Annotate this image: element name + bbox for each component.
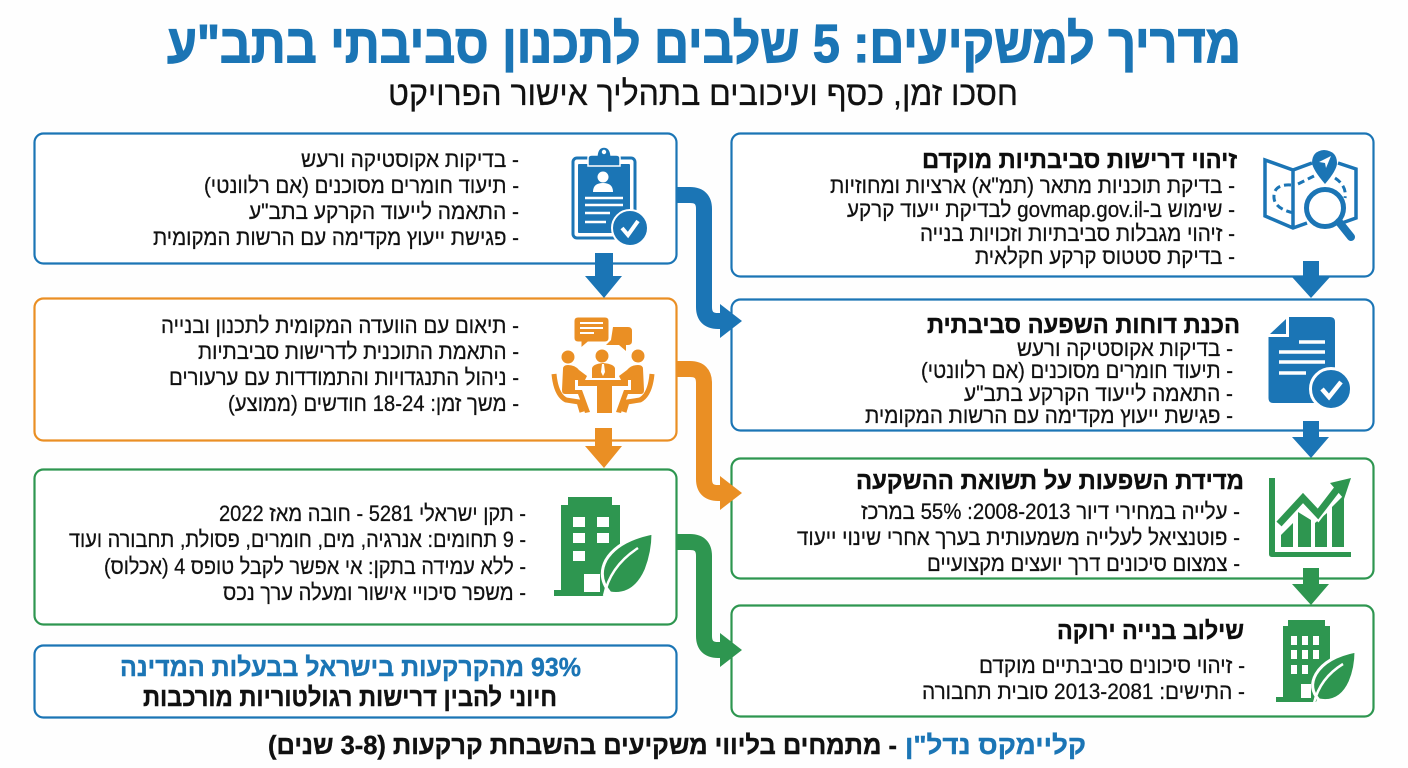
text block: left 2: - התאמת התוכנית לדרישות סביבתיות [198, 339, 519, 364]
text block: left 1: - פגישת ייעוץ מקדימה עם הרשות המקומית [153, 225, 519, 250]
icon: document with check [1268, 317, 1352, 410]
panel: environmental impact reports (right 2) [732, 300, 1374, 430]
footer [268, 730, 1086, 760]
text block: right 2: - תיעוד חומרים מסוכנים (אם רלוונטי) [921, 358, 1233, 383]
arrow: left 1 down [585, 253, 622, 298]
icon: green building with leaf [554, 497, 653, 596]
heading: right 3: מדידת השפעות על תשואת ההשקעה [856, 468, 1244, 495]
arrow: right 2 down [1292, 421, 1329, 458]
text block: left 2: - תיאום עם הוועדה המקומית לתכנון ובנייה [161, 313, 519, 338]
text block: right 4: - זיהוי סיכונים סביבתיים מוקדם [979, 653, 1245, 678]
arrow: right 3 down [1292, 568, 1329, 605]
text block: right 4 [922, 653, 1245, 704]
text block: left 2 [161, 313, 519, 416]
panel: early identification (right 1) [732, 134, 1374, 276]
text block: right 2: - פגישת ייעוץ מקדימה עם הרשות המקומית [865, 403, 1233, 428]
text block: right 3 [797, 499, 1240, 576]
panel: local committee coordination (left 2) [34, 298, 676, 440]
callout stat: 93% מהקרקעות בישראל בבעלות המדינה [120, 652, 581, 682]
text block: right 1: - בדיקת סטטוס קרקע חקלאית [975, 244, 1235, 269]
icon: clipboard with check [573, 147, 648, 246]
text block: right 2 [865, 336, 1233, 428]
heading: right 1: זיהוי דרישות סביבתיות מוקדם [922, 147, 1237, 174]
text block: right 1 [830, 173, 1235, 269]
text block: right 1: - בדיקת תוכניות מתאר (תמ"א) ארציות ומחוזיות [830, 173, 1235, 198]
text block: right 3: - צמצום סיכונים דרך יועצים מקצועיים [927, 551, 1240, 576]
text block: left 1: - תיעוד חומרים מסוכנים (אם רלוונטי) [204, 173, 519, 198]
connector arrow: blue [676, 195, 742, 338]
text block: left 3: - תקן ישראלי 5281 - חובה מאז 2022 [219, 501, 526, 526]
text block: left 1: - בדיקות אקוסטיקה ורעש [301, 147, 519, 172]
text block: left 3 [69, 501, 526, 605]
panel: israeli standard 5281 (left 3) [34, 470, 676, 624]
panel: green building integration (right 4) [732, 606, 1374, 716]
panel: measuring ROI (right 3) [732, 458, 1374, 578]
subtitle: חסכו זמן, כסף ועיכובים בתהליך אישור הפרויקט [388, 75, 1018, 113]
text block: right 1: - זיהוי מגבלות סביבתיות וזכויות בנייה [920, 221, 1235, 246]
arrow: right 1 down [1292, 261, 1330, 298]
callout text: חיוני להבין דרישות רגולטוריות מורכבות [143, 682, 557, 712]
icon: map with pin and magnifier [1265, 150, 1356, 237]
footer brand: קליימקס נדל"ן [905, 730, 1086, 760]
icon: rising bar chart [1269, 478, 1351, 557]
heading: right 4: שילוב בנייה ירוקה [1057, 618, 1244, 645]
icon: small green building with leaf [1276, 620, 1356, 703]
text block: right 2: - התאמה לייעוד הקרקע בתב"ע [964, 381, 1233, 406]
text block: left 3: - משפר סיכויי אישור ומעלה ערך נכס [223, 580, 526, 605]
text block: right 3: - עלייה במחירי דיור 2008-2013: 55% במרכז [861, 499, 1240, 524]
panel: acoustic checks (left 1) [34, 134, 676, 264]
footer tagline: - מתמחים בליווי משקיעים בהשבחת קרקעות (3-8 שנים) [268, 730, 897, 760]
text block: left 2: - משך זמן: 18-24 חודשים (ממוצע) [228, 391, 519, 416]
arrow: left 2 down [585, 428, 622, 468]
text block: left 3: - ללא עמידה בתקן: אי אפשר לקבל טופס 4 (אכלוס) [104, 554, 526, 579]
text block: right 2: - בדיקות אקוסטיקה ורעש [1017, 336, 1233, 361]
panel: 93% state land callout [34, 646, 676, 718]
connector arrow: orange [676, 369, 742, 510]
text block: right 3: - פוטנציאל לעלייה משמעותית בערך אחרי שינוי ייעוד [797, 525, 1240, 550]
title: מדריך למשקיעים: 5 שלבים לתכנון סביבתי בתב"ע [167, 14, 1241, 74]
connector arrow: green [676, 542, 742, 667]
text block: left 3: - 9 תחומים: אנרגיה, מים, חומרים, פסולת, תחבורה ועוד [69, 527, 526, 552]
heading: right 2: הכנת דוחות השפעה סביבתית [927, 312, 1240, 339]
text block: left 1: - התאמה לייעוד הקרקע בתב"ע [249, 199, 519, 224]
text block: right 1: - שימוש ב-govmap.gov.il לבדיקת ייעוד קרקע [847, 197, 1235, 222]
text block: right 4: - התישים: 2013-2081 סובית תחבורה [922, 679, 1245, 704]
text block: left 2: - ניהול התנגדויות והתמודדות עם ערעורים [169, 365, 519, 390]
text block: left 1 [153, 147, 519, 250]
icon: meeting around table [554, 317, 652, 413]
